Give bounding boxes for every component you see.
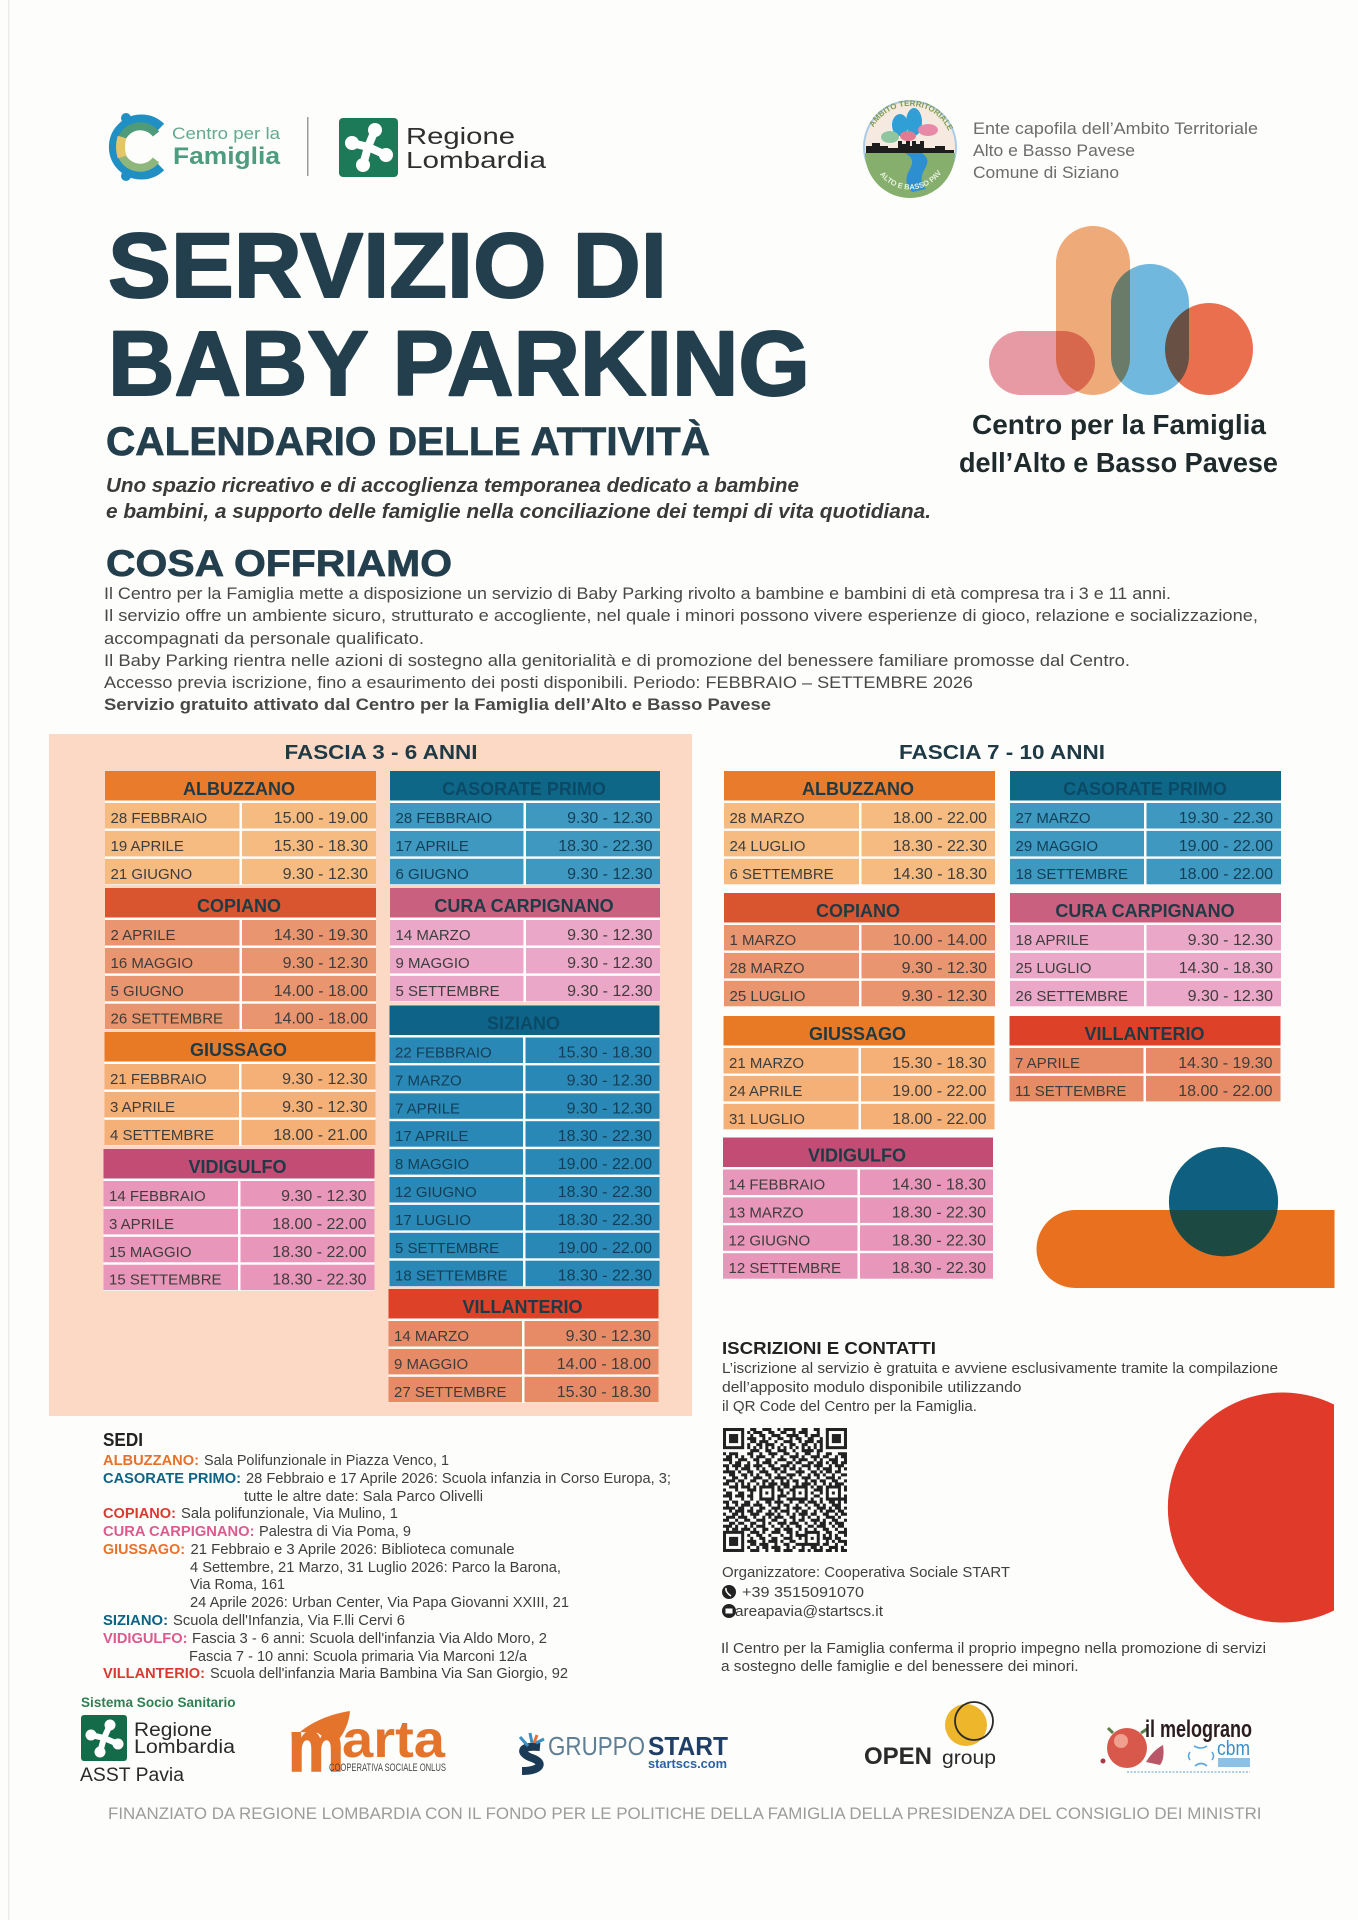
heading: iscrizioni e contatti: ISCRIZIONI E CONTATTI [722,1338,936,1358]
schedule: Cura Carpignano 7-10: 9.30 - 12.30 [1188,932,1273,949]
section: sedi: COPIANO: [103,1506,176,1522]
schedule: Vidigulfo 7-10: 13 MARZO [728,1204,804,1221]
schedule: Albuzzano 3-6: 9.30 - 12.30 [283,866,368,883]
schedule: Vidigulfo 7-10: 14 FEBBRAIO [728,1176,825,1194]
schedule: Vidigulfo 7-10: 18.30 - 22.30 [892,1260,986,1277]
heading: cosa offriamo: COSA OFFRIAMO [106,543,452,584]
logo: Centro per la Famiglia: Famiglia [173,143,281,170]
section: sedi: tutte le altre date: Sala Parco Olivelli [244,1489,483,1505]
schedule: Albuzzano 3-6 [105,771,376,885]
schedule: Cura Carpignano 7-10: 25 LUGLIO [1016,960,1091,977]
schedule: Copiano 7-10: COPIANO [816,901,900,921]
schedule: Siziano 3-6: 19.00 - 22.00 [558,1156,652,1173]
section: sedi: ALBUZZANO: [103,1453,199,1469]
schedule: Siziano 3-6: 18.30 - 22.30 [558,1128,652,1145]
schedule: Siziano 3-6: 8 MAGGIO [395,1156,469,1173]
schedule: Casorate Primo 7-10: 27 MARZO [1016,810,1091,827]
schedule: Villanterio 7-10: VILLANTERIO [1084,1024,1204,1044]
schedule: Albuzzano 3-6: ALBUZZANO [183,779,295,799]
schedule: Villanterio 3-6: 14.00 - 18.00 [557,1356,651,1373]
schedule: Siziano 3-6: 15.30 - 18.30 [558,1044,652,1062]
schedule: Villanterio 3-6: VILLANTERIO [462,1297,582,1317]
schedule: Albuzzano 7-10 [724,771,995,884]
schedule: Siziano 3-6: 17 LUGLIO [395,1212,471,1229]
intro text: e bambini, a supporto delle famiglie nella conciliazione dei tempi di vita quotidiana. [106,501,931,523]
section: sedi: Fascia 7 - 10 anni: Scuola primaria Via Marconi 12/a [189,1649,528,1665]
section: sedi: SIZIANO: [103,1613,168,1629]
intro text [106,475,931,523]
schedule: Vidigulfo 3-6: 9.30 - 12.30 [281,1188,367,1205]
schedule: Vidigulfo 7-10 [723,1138,993,1279]
schedule: Casorate Primo 7-10: 18 SETTEMBRE [1016,866,1128,883]
schedule: Giussago 3-6: 18.00 - 21.00 [273,1127,368,1144]
logo: Regione Lombardia ASST Pavia: ASST Pavia [80,1765,184,1786]
schedule: Siziano 3-6: 22 FEBBRAIO [395,1044,492,1062]
intro text: Uno spazio ricreativo e di accoglienza temporanea dedicato a bambine [106,475,799,497]
schedule: Vidigulfo 3-6: 18.30 - 22.00 [272,1244,367,1261]
schedule: Siziano 3-6: 5 SETTEMBRE [395,1240,499,1257]
heading: fascia 3-6 anni: FASCIA 3 - 6 ANNI [284,741,478,764]
section: sedi: CASORATE PRIMO: [103,1471,241,1487]
section: sedi: Scuola dell'Infanzia, Via F.lli Cervi 6 [173,1613,405,1629]
logo: Centro per la Famiglia dell'Alto e Basso Pavese: Centro per la Famiglia [972,409,1266,440]
logo: Marta cooperativa: arta [342,1711,446,1769]
logo: il melograno cbm: il melograno [1145,1716,1252,1743]
logo: Centro per la Famiglia dell'Alto e Basso Pavese [959,226,1278,478]
schedule: Cura Carpignano 3-6: 9.30 - 12.30 [567,955,653,972]
schedule: Giussago 7-10: GIUSSAGO [809,1024,906,1044]
section: iscrizioni e contatti: +39 3515091070 [742,1585,864,1601]
schedule: Siziano 3-6: SIZIANO [487,1014,560,1034]
schedule: Copiano 3-6: 26 SETTEMBRE [110,1011,223,1028]
schedule: Albuzzano 7-10: 24 LUGLIO [730,838,805,855]
schedule: Casorate Primo 3-6: 17 APRILE [396,838,469,855]
logo: Marta cooperativa [288,1707,446,1787]
heading: fascia 7-10 anni: FASCIA 7 - 10 ANNI [899,741,1105,764]
schedule: Giussago 3-6: 9.30 - 12.30 [282,1099,368,1116]
schedule: Copiano 7-10: 9.30 - 12.30 [902,988,987,1005]
schedule: Siziano 3-6: 17 APRILE [395,1128,468,1145]
schedule: Copiano 7-10: 1 MARZO [730,932,796,949]
section: sedi: GIUSSAGO: [103,1542,185,1558]
schedule: Vidigulfo 3-6: 14 FEBBRAIO [109,1188,206,1205]
section: sedi [103,1430,671,1682]
schedule: Siziano 3-6 [390,1006,660,1286]
schedule: Vidigulfo 3-6 [104,1149,374,1291]
schedule: Villanterio 7-10: 18.00 - 22.00 [1178,1083,1273,1100]
schedule: Copiano 7-10: 10.00 - 14.00 [893,932,987,949]
schedule: Vidigulfo 7-10: 18.30 - 22.30 [892,1232,986,1249]
schedule: Villanterio 3-6: 9 MAGGIO [394,1356,468,1373]
schedule: Vidigulfo 3-6: 15 SETTEMBRE [109,1272,222,1289]
schedule: Albuzzano 7-10: 18.30 - 22.30 [893,838,987,855]
section: iscrizioni e contatti [721,1338,1278,1675]
schedule: Villanterio 3-6: 27 SETTEMBRE [394,1384,507,1401]
logo: Regione Lombardia [339,118,546,177]
schedule: Siziano 3-6: 9.30 - 12.30 [567,1100,652,1117]
schedule: Casorate Primo 7-10: CASORATE PRIMO [1063,779,1227,799]
schedule: Giussago 7-10: 21 MARZO [729,1055,804,1072]
emblem: Ambito Territoriale: AMBITO TERRITORIALE [870,100,954,131]
schedule: Villanterio 7-10: 11 SETTEMBRE [1015,1083,1126,1100]
schedule: Giussago 3-6: 4 SETTEMBRE [110,1127,214,1144]
logo: Gruppo Start: startscs.com [648,1756,727,1771]
section: sedi: CURA CARPIGNANO: [103,1524,254,1540]
schedule: Copiano 7-10: 28 MARZO [730,960,805,977]
schedule: Villanterio 3-6: 9.30 - 12.30 [566,1328,651,1345]
schedule: Cura Carpignano 3-6: CURA CARPIGNANO [434,896,614,916]
schedule: Casorate Primo 7-10: 19.30 - 22.30 [1179,810,1273,827]
schedule: Siziano 3-6: 7 MARZO [395,1072,462,1089]
logo: Gruppo Start: GRUPPO [548,1731,645,1761]
heading: sedi: SEDI [103,1430,143,1450]
section: iscrizioni e contatti: Il Centro per la Famiglia conferma il proprio impegno nella promozione di servizi [721,1641,1266,1657]
schedule: Vidigulfo 7-10: 14.30 - 18.30 [892,1176,986,1194]
logo: Regione Lombardia: Lombardia [406,147,546,173]
logo: Gruppo Start [520,1731,728,1771]
section: iscrizioni e contatti: L’iscrizione al servizio è gratuita e avviene esclusivamente tramite la compilazione [722,1361,1278,1377]
schedule: Albuzzano 7-10: ALBUZZANO [802,779,914,799]
schedule: Casorate Primo 7-10: 19.00 - 22.00 [1179,838,1273,855]
schedule: Cura Carpignano 3-6: 14 MARZO [396,927,471,944]
schedule: Albuzzano 3-6: 15.30 - 18.30 [274,838,368,855]
schedule: Casorate Primo 3-6: 9.30 - 12.30 [567,866,653,883]
section: sedi: 4 Settembre, 21 Marzo, 31 Luglio 2026: Parco la Barona, [190,1560,561,1576]
schedule: Vidigulfo 7-10: 12 SETTEMBRE [728,1260,841,1277]
schedule: Vidigulfo 3-6: 18.00 - 22.00 [272,1216,367,1233]
icon: email [722,1604,736,1618]
logo: Regione Lombardia: Regione [406,123,515,149]
text: cosa offriamo: Accesso previa iscrizione, fino a esaurimento dei posti disponibili. Periodo: FEBBRAIO – SETTEMBRE 2026 [104,674,973,692]
schedule: Siziano 3-6: 18.30 - 22.30 [558,1184,652,1201]
decoration: red circle [1168,1392,1334,1622]
schedule: Cura Carpignano 3-6 [390,888,660,1002]
schedule: Casorate Primo 7-10: 18.00 - 22.00 [1179,866,1273,883]
logo: Open group [864,1702,996,1770]
section: sedi: VILLANTERIO: [103,1666,205,1682]
schedule: Casorate Primo 3-6: CASORATE PRIMO [442,779,606,799]
logo: Centro per la Famiglia [113,113,281,181]
schedule: Villanterio 3-6: 14 MARZO [394,1328,469,1345]
schedule: Casorate Primo 7-10: 29 MAGGIO [1016,838,1098,855]
schedule: Copiano 3-6: 14.30 - 19.30 [274,927,368,944]
section: sedi: Sala polifunzionale, Via Mulino, 1 [181,1506,398,1522]
section: iscrizioni e contatti: dell’apposito modulo disponibile utilizzando [722,1380,1022,1396]
section: sedi: Sala Polifunzionale in Piazza Venco, 1 [204,1453,449,1469]
schedule: Villanterio 7-10 [1010,1016,1280,1101]
title: BABY PARKING [108,313,810,415]
logo: Centro per la Famiglia dell'Alto e Basso Pavese: dell’Alto e Basso Pavese [959,447,1278,478]
schedule: Cura Carpignano 7-10: CURA CARPIGNANO [1055,901,1235,921]
text: cosa offriamo: accompagnati da personale qualificato. [104,630,424,648]
logo: Regione Lombardia ASST Pavia: Lombardia [134,1737,235,1758]
schedule: Cura Carpignano 7-10 [1010,893,1281,1006]
schedule: Copiano 7-10: 9.30 - 12.30 [902,960,987,977]
schedule: Siziano 3-6: 7 APRILE [395,1100,460,1117]
schedule: Vidigulfo 3-6: 3 APRILE [109,1216,174,1233]
logo: Centro per la Famiglia: Centro per la [172,124,281,143]
text: cosa offriamo: Il Centro per la Famiglia mette a disposizione un servizio di Baby Parking rivolto a bambine e bambini di età compresa tra i 3 e 11 anni. [104,585,1171,603]
text: ente capofila: Ente capofila dell’Ambito Territoriale [973,120,1258,138]
schedule: Vidigulfo 3-6: VIDIGULFO [188,1157,286,1177]
logo: Open group: group [942,1748,996,1769]
schedule: Albuzzano 3-6: 19 APRILE [110,838,184,855]
schedule: Giussago 3-6 [104,1032,376,1146]
schedule: Albuzzano 7-10: 6 SETTEMBRE [730,866,834,883]
schedule: Siziano 3-6: 18.30 - 22.30 [558,1212,652,1229]
section: sedi: VIDIGULFO: [103,1631,188,1647]
schedule: Giussago 3-6: 21 FEBBRAIO [110,1071,207,1088]
schedule: Cura Carpignano 7-10: 14.30 - 18.30 [1179,960,1273,977]
logo: Marta cooperativa: COOPERATIVA SOCIALE ONLUS [329,1762,446,1774]
emblem: Ambito Territoriale [863,100,957,198]
schedule: Copiano 7-10 [724,893,995,1006]
schedule: Casorate Primo 3-6: 28 FEBBRAIO [396,810,492,827]
schedule: Copiano 3-6: 14.00 - 18.00 [274,983,368,1000]
schedule: Casorate Primo 3-6: 6 GIUGNO [396,866,469,883]
schedule: Cura Carpignano 3-6: 9 MAGGIO [396,955,470,972]
section: sedi: 21 Febbraio e 3 Aprile 2026: Biblioteca comunale [190,1542,514,1558]
logo: Regione Lombardia ASST Pavia: Regione [134,1720,212,1741]
section: iscrizioni e contatti: il QR Code del Centro per la Famiglia. [722,1399,977,1415]
schedule: Siziano 3-6: 18.30 - 22.30 [558,1268,652,1285]
schedule: Copiano 3-6: 9.30 - 12.30 [283,955,368,972]
section: sedi: 24 Aprile 2026: Urban Center, Via Papa Giovanni XXIII, 21 [190,1595,569,1611]
section: iscrizioni e contatti: Organizzatore: Cooperativa Sociale START [722,1565,1010,1581]
schedule: Copiano 3-6 [105,888,376,1030]
schedule: Casorate Primo 7-10 [1010,771,1281,884]
QR code [723,1430,847,1550]
schedule: Cura Carpignano 7-10: 26 SETTEMBRE [1016,988,1128,1005]
schedule: Siziano 3-6: 19.00 - 22.00 [558,1240,652,1257]
schedule: Siziano 3-6: 9.30 - 12.30 [567,1072,652,1089]
schedule: Vidigulfo 7-10: 12 GIUGNO [728,1232,810,1249]
section: sedi: 28 Febbraio e 17 Aprile 2026: Scuola infanzia in Corso Europa, 3; [246,1471,671,1487]
logo: Marta cooperativa: m [288,1707,344,1787]
footer funding line: FINANZIATO DA REGIONE LOMBARDIA CON IL FONDO PER LE POLITICHE DELLA FAMIGLIA DELLA PRESIDENZA DEL CONSIGLIO DEI MINISTRI [108,1804,1262,1823]
schedule: Giussago 3-6: 9.30 - 12.30 [282,1071,368,1088]
schedule: Villanterio 7-10: 7 APRILE [1015,1055,1080,1072]
title [108,215,810,415]
schedule: Cura Carpignano 3-6: 9.30 - 12.30 [567,983,653,1000]
section: sedi: Fascia 3 - 6 anni: Scuola dell'infanzia Via Aldo Moro, 2 [192,1631,547,1647]
schedule: Copiano 7-10: 25 LUGLIO [730,988,805,1005]
logo: il melograno cbm: cbm [1217,1738,1250,1760]
text: cosa offriamo: Servizio gratuito attivato dal Centro per la Famiglia dell’Alto e Basso Pavese [104,696,771,714]
decoration: orange pill and blue circle [1036,1147,1334,1288]
schedule: Villanterio 3-6: 15.30 - 18.30 [557,1384,651,1401]
schedule: Copiano 3-6: 14.00 - 18.00 [274,1011,368,1028]
schedule: Albuzzano 3-6: 21 GIUGNO [110,866,192,883]
text: ente capofila [973,120,1258,182]
text: cosa offriamo [104,585,1258,714]
section: sedi: Via Roma, 161 [190,1577,285,1593]
schedule: Copiano 3-6: 2 APRILE [110,927,176,944]
schedule: Vidigulfo 3-6: 18.30 - 22.30 [272,1272,367,1289]
panel: fascia 7-10 anni [723,741,1281,1279]
schedule: Casorate Primo 3-6 [390,771,660,885]
text: ente capofila: Alto e Basso Pavese [973,142,1135,160]
schedule: Casorate Primo 3-6: 9.30 - 12.30 [567,810,653,827]
text: ente capofila: Comune di Siziano [973,164,1119,182]
schedule: Villanterio 7-10: 14.30 - 19.30 [1178,1055,1273,1072]
logo: Regione Lombardia ASST Pavia: Sistema Socio Sanitario [81,1694,236,1710]
logo: Open group: OPEN [864,1743,932,1770]
section: sedi: Palestra di Via Poma, 9 [259,1524,411,1540]
schedule: Albuzzano 3-6: 15.00 - 19.00 [274,810,368,827]
schedule: Cura Carpignano 7-10: 18 APRILE [1016,932,1089,949]
schedule: Albuzzano 7-10: 28 MARZO [730,810,805,827]
section: iscrizioni e contatti: a sostegno delle famiglie e del benessere dei minori. [721,1659,1078,1675]
schedule: Albuzzano 3-6: 28 FEBBRAIO [110,810,207,827]
schedule: Cura Carpignano 7-10: 9.30 - 12.30 [1188,988,1273,1005]
schedule: Copiano 3-6: COPIANO [197,896,281,916]
subtitle: CALENDARIO DELLE ATTIVITÀ [106,419,710,464]
schedule: Giussago 3-6: 3 APRILE [110,1099,175,1116]
logo: Gruppo Start: START [648,1731,728,1761]
schedule: Vidigulfo 7-10: VIDIGULFO [808,1146,906,1166]
schedule: Giussago 7-10: 15.30 - 18.30 [892,1055,987,1072]
schedule: Vidigulfo 7-10: 18.30 - 22.30 [892,1204,986,1221]
schedule: Siziano 3-6: 18 SETTEMBRE [395,1268,508,1285]
schedule: Giussago 7-10: 19.00 - 22.00 [892,1083,987,1100]
schedule: Albuzzano 7-10: 14.30 - 18.30 [893,866,987,883]
schedule: Cura Carpignano 3-6: 5 SETTEMBRE [396,983,500,1000]
schedule: Giussago 3-6: GIUSSAGO [190,1040,287,1060]
schedule: Albuzzano 7-10: 18.00 - 22.00 [893,810,987,827]
icon: phone [722,1585,736,1599]
logo: Regione Lombardia ASST Pavia [80,1694,236,1786]
text: cosa offriamo: Il Baby Parking rientra nelle azioni di sostegno alla genitorialità e di promozione del benessere familiare promosse dal Centro. [104,652,1130,670]
schedule: Giussago 7-10: 24 APRILE [729,1083,802,1100]
schedule: Giussago 7-10 [724,1016,994,1129]
text: cosa offriamo: Il servizio offre un ambiente sicuro, strutturato e accogliente, nel quale i minori possono vivere esperienze di gioco, relazione e socializzazione, [104,607,1258,625]
schedule: Giussago 7-10: 31 LUGLIO [729,1111,805,1128]
schedule: Casorate Primo 3-6: 18.30 - 22.30 [558,838,653,855]
section: sedi: Scuola dell'infanzia Maria Bambina Via San Giorgio, 92 [210,1666,568,1682]
section: iscrizioni e contatti: areapavia@startscs.it [735,1604,883,1620]
schedule: Siziano 3-6: 12 GIUGNO [395,1184,477,1201]
title: SERVIZIO DI [108,215,667,317]
logo: il melograno cbm [1100,1716,1252,1772]
schedule: Giussago 7-10: 18.00 - 22.00 [892,1111,987,1128]
schedule: Cura Carpignano 3-6: 9.30 - 12.30 [567,927,653,944]
schedule: Copiano 3-6: 16 MAGGIO [110,955,193,972]
schedule: Vidigulfo 3-6: 15 MAGGIO [109,1244,192,1261]
panel: fascia 3-6 anni [49,734,692,1416]
schedule: Villanterio 3-6 [388,1289,658,1403]
schedule: Copiano 3-6: 5 GIUGNO [110,983,184,1000]
